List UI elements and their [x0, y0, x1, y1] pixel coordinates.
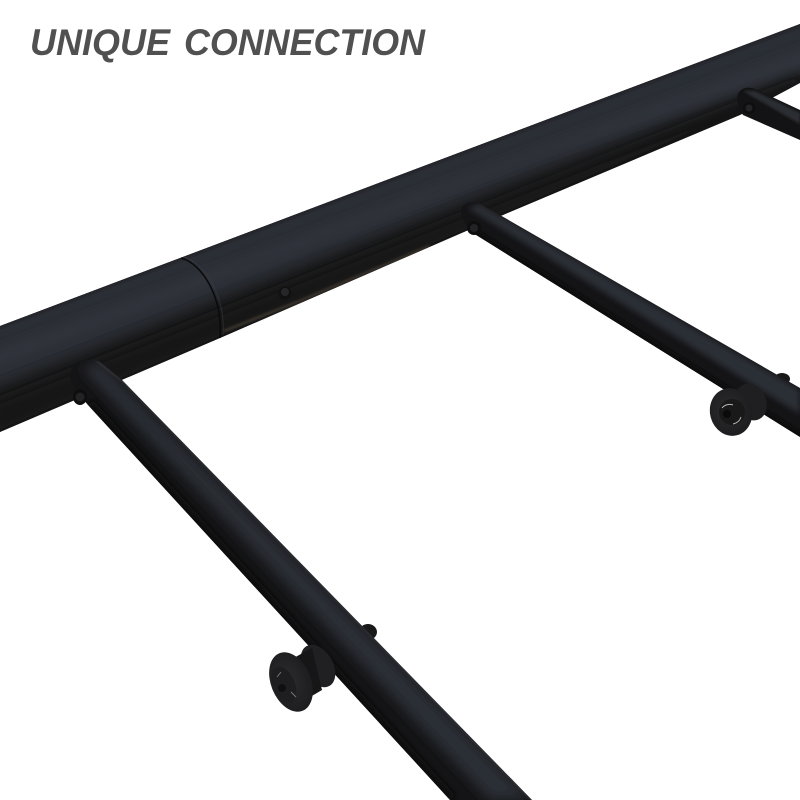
sleeve joint seam [181, 257, 223, 338]
title: CONNECTION [184, 22, 426, 63]
rail: middle slat [464, 202, 800, 437]
outer wheel [705, 383, 757, 441]
rear nut behind near slat [359, 624, 377, 640]
inner flange [729, 378, 773, 426]
tube: soft top edge [0, 24, 800, 326]
bolt at far slat [743, 102, 755, 114]
neck [290, 648, 322, 700]
inner flange [294, 639, 342, 693]
tube: brown glint along lower edge [224, 246, 430, 331]
caster near left [261, 639, 342, 718]
tube: lower dark band [0, 80, 800, 438]
outer wheel [261, 646, 321, 718]
rail: far right slat [737, 88, 800, 140]
title [30, 22, 426, 63]
title: UNIQUE [30, 22, 171, 63]
tube: blue-grey upper shading [0, 12, 800, 392]
caster right [705, 378, 773, 441]
bolt at near slat [73, 389, 87, 405]
main horizontal tube [0, 0, 800, 450]
rear nut behind middle slat [774, 373, 790, 385]
rail: near left slat [80, 360, 532, 800]
bolt at middle slat [467, 221, 481, 235]
bolt on sleeve [278, 286, 292, 300]
wheel bearing ring [719, 399, 745, 425]
